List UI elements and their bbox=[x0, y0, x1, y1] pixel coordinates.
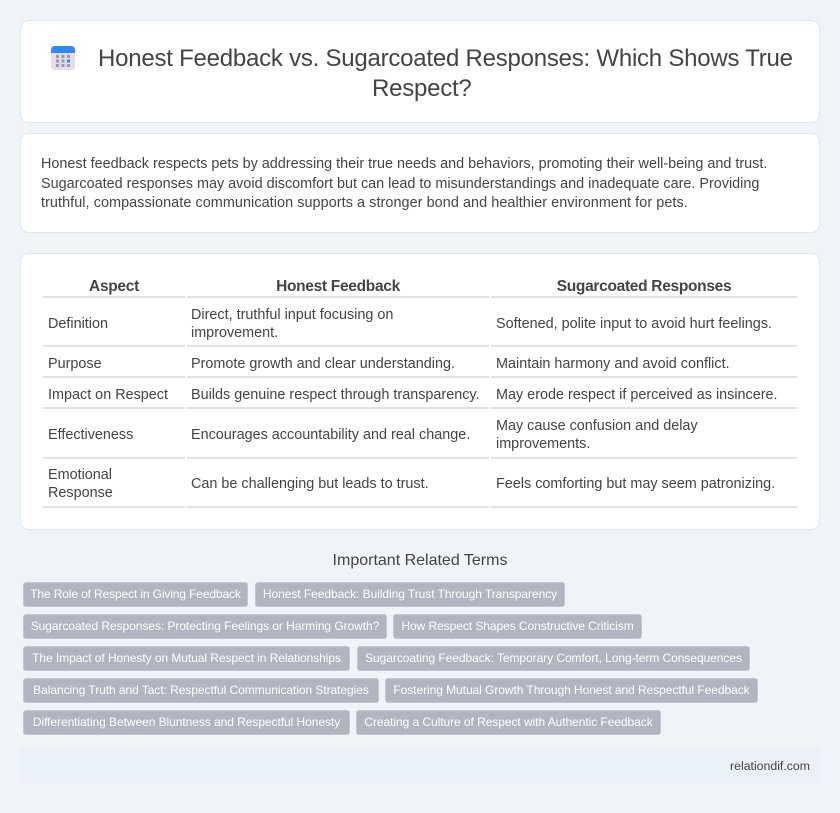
panel: comparison table card bbox=[20, 253, 820, 530]
related term chips bbox=[23, 582, 758, 735]
chip: Honest Feedback: Building Trust Through Transparency bbox=[263, 587, 557, 601]
chip bbox=[356, 710, 661, 735]
chip: Balancing Truth and Tact: Respectful Communication Strategies bbox=[33, 683, 369, 697]
row: Definition: Direct, truthful input focusing on bbox=[191, 307, 393, 323]
chip bbox=[357, 646, 750, 671]
panel: summary card bbox=[20, 133, 820, 233]
row: Emotional Response: Feels comforting but may seem patronizing. bbox=[496, 476, 775, 492]
row: Effectiveness: May cause confusion and delay bbox=[496, 418, 698, 434]
chip bbox=[23, 582, 248, 607]
row: Impact on Respect: Builds genuine respect through transparency. bbox=[191, 387, 480, 403]
chip: Fostering Mutual Growth Through Honest and Respectful Feedback bbox=[393, 683, 750, 697]
row: Purpose: Promote growth and clear understanding. bbox=[191, 356, 455, 372]
footer source text: relationdif.com bbox=[730, 759, 810, 773]
chip bbox=[393, 614, 642, 639]
summary text: Sugarcoated responses may avoid discomfort but can lead to misunderstandings and inadequate care. Providing bbox=[41, 176, 759, 192]
chip: How Respect Shapes Constructive Criticism bbox=[401, 619, 634, 633]
header: Sugarcoated Responses: Sugarcoated Responses bbox=[557, 278, 731, 295]
chip: Creating a Culture of Respect with Authentic Feedback bbox=[364, 715, 653, 729]
row: Definition: Softened, polite input to avoid hurt feelings. bbox=[496, 316, 772, 332]
row: Emotional Response bbox=[48, 467, 775, 501]
icon: calendar bbox=[51, 46, 75, 70]
chip: The Impact of Honesty on Mutual Respect in Relationships bbox=[32, 651, 341, 665]
row: Impact on Respect bbox=[48, 387, 778, 403]
row: Purpose: Purpose bbox=[48, 356, 102, 372]
row: Emotional Response: Can be challenging but leads to trust. bbox=[191, 476, 429, 492]
summary text: truthful, compassionate communication supports a stronger bond and healthier environment for pets. bbox=[41, 195, 688, 211]
chip: Differentiating Between Bluntness and Respectful Honesty bbox=[33, 715, 340, 729]
row: Emotional Response: Emotional bbox=[48, 467, 112, 483]
chip: Sugarcoated Responses: Protecting Feelings or Harming Growth? bbox=[31, 619, 379, 633]
chip: The Role of Respect in Giving Feedback bbox=[30, 587, 241, 601]
row: Effectiveness: improvements. bbox=[496, 436, 590, 452]
summary text bbox=[41, 156, 767, 211]
header: Honest Feedback: Honest Feedback bbox=[276, 278, 400, 295]
title: Honest Feedback vs. Sugarcoated Responses: Which Shows True bbox=[98, 45, 793, 72]
row: Definition bbox=[48, 307, 772, 341]
chip bbox=[23, 678, 379, 703]
title bbox=[98, 45, 793, 102]
footer bar bbox=[20, 749, 820, 783]
row: Effectiveness: Encourages accountability and real change. bbox=[191, 427, 470, 443]
row: Effectiveness bbox=[48, 418, 698, 452]
heading: Important Related Terms: Important Related Terms bbox=[333, 552, 507, 569]
row: Emotional Response: Response bbox=[48, 485, 113, 501]
row: Purpose: Maintain harmony and avoid conflict. bbox=[496, 356, 730, 372]
chip bbox=[255, 582, 565, 607]
title: Respect? bbox=[372, 75, 472, 102]
chip bbox=[23, 710, 350, 735]
row: Impact on Respect: Impact on Respect bbox=[48, 387, 168, 403]
summary text: Honest feedback respects pets by addressing their true needs and behaviors, promoting their well-being and trust. bbox=[41, 156, 767, 172]
panel: title card bbox=[20, 20, 820, 123]
row: Definition: improvement. bbox=[191, 325, 278, 341]
row: Effectiveness: Effectiveness bbox=[48, 427, 133, 443]
chip bbox=[385, 678, 758, 703]
chip: Sugarcoating Feedback: Temporary Comfort, Long-term Consequences bbox=[365, 651, 742, 665]
chip bbox=[23, 614, 387, 639]
chip bbox=[23, 646, 350, 671]
row: Impact on Respect: May erode respect if perceived as insincere. bbox=[496, 387, 778, 403]
row: Purpose bbox=[48, 356, 730, 372]
row: Definition: Definition bbox=[48, 316, 108, 332]
header: Aspect: Aspect bbox=[89, 278, 139, 295]
comparison table bbox=[43, 278, 797, 508]
